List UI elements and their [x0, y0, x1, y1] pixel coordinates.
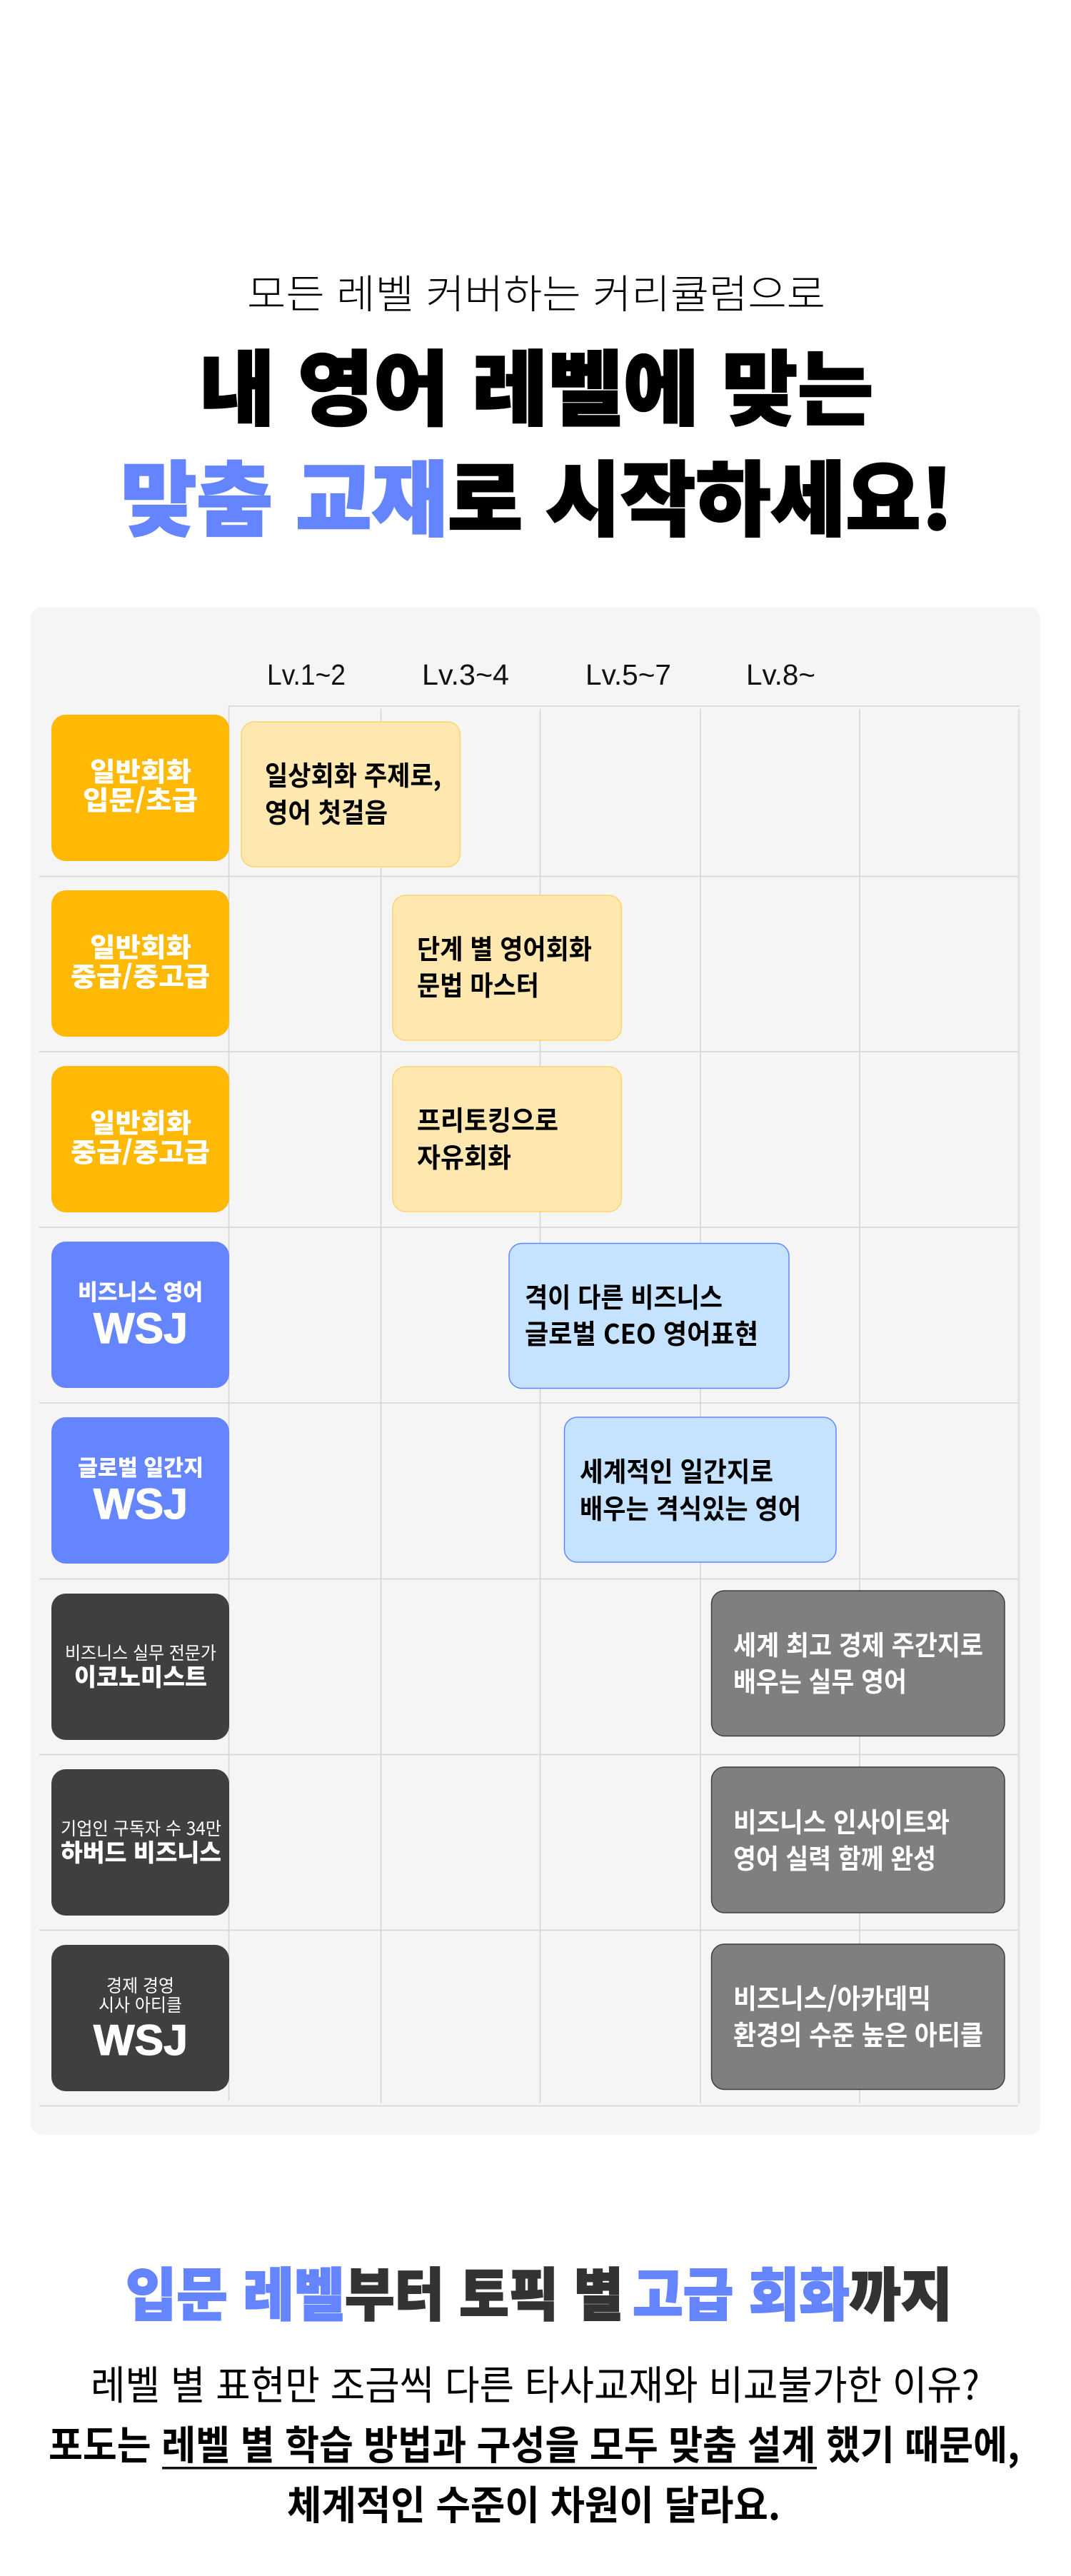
title: 내 영어 레벨에 맞는 — [199, 324, 873, 442]
label: 글로벌 일간지 WSJ: WSJ — [94, 1480, 188, 1528]
card: 비즈니스 인사이트: 비즈니스 인사이트와 — [733, 1801, 950, 1840]
card: 프리토킹: 자유회화 — [417, 1136, 511, 1175]
card: 비즈니스/아카데믹: 비즈니스/아카데믹 — [733, 1977, 931, 2016]
bottom heading: 까지 — [850, 2250, 952, 2333]
label: 글로벌 일간지 WSJ: 글로벌 일간지 — [78, 1450, 203, 1482]
card: 일상회화: 일상회화 주제로, — [265, 754, 441, 793]
label: 경제 경영 시사 아티클 WSJ: WSJ — [94, 2016, 188, 2064]
card: 프리토킹 — [393, 1067, 621, 1212]
card: 격이 다른 비즈니스: 격이 다른 비즈니스 — [525, 1276, 723, 1315]
card: 단계 별 영어회화 — [393, 895, 621, 1040]
level headers: Lv.8~ — [746, 658, 815, 691]
label: 이코노미스트 — [51, 1594, 229, 1740]
label: 이코노미스트: 이코노미스트 — [74, 1658, 207, 1693]
level headers: Lv.1~2 — [267, 658, 346, 691]
label: 일반회화 입문/초급 — [51, 715, 229, 861]
card: 격이 다른 비즈니스: 글로벌 CEO 영어표현 — [525, 1312, 758, 1352]
label: 일반회화 입문/초급: 입문/초급 — [83, 779, 198, 817]
bottom heading: 부터 토픽 별 — [345, 2250, 623, 2333]
label: 경제 경영 시사 아티클 WSJ: 시사 아티클 — [99, 1991, 182, 2017]
label: 일반회화 중급/중고급 (프리토킹): 일반회화 — [90, 1102, 191, 1140]
label: 경제 경영 시사 아티클 WSJ: 경제 경영 — [106, 1972, 174, 1998]
title — [121, 324, 953, 553]
card: 세계적인 일간지: 세계적인 일간지로 — [580, 1450, 773, 1489]
bottom heading: 입문 레벨 — [126, 2250, 345, 2333]
panel: curriculum table — [31, 608, 1040, 2135]
label: 일반회화 중급/중고급: 중급/중고급 — [71, 955, 210, 994]
card: 비즈니스 인사이트 — [711, 1767, 1005, 1913]
label: 일반회화 입문/초급: 일반회화 — [90, 750, 191, 789]
level headers: Lv.5~7 — [585, 658, 671, 691]
card: 세계 최고 경제 주간지 — [711, 1591, 1005, 1736]
title: 맞춤 교재 — [121, 435, 448, 553]
bottom text — [49, 2354, 1020, 2532]
subtitle: 모든 레벨 커버하는 커리큘럼으로 — [247, 263, 825, 321]
label: 일반회화 중급/중고급 (프리토킹) — [51, 1066, 229, 1212]
label: 일반회화 중급/중고급 — [51, 890, 229, 1037]
card: 비즈니스/아카데믹: 환경의 수준 높은 아티클 — [733, 2013, 983, 2053]
level headers: Lv.3~4 — [422, 658, 509, 691]
label: 글로벌 일간지 WSJ — [51, 1417, 229, 1564]
label: 일반회화 중급/중고급: 일반회화 — [90, 926, 191, 965]
label: 하버드 비즈니스 — [51, 1769, 229, 1916]
label: 하버드 비즈니스: 기업인 구독자 수 34만 — [61, 1815, 221, 1841]
card: 일상회화: 영어 첫걸음 — [265, 791, 388, 830]
card: 비즈니스 인사이트: 영어 실력 함께 완성 — [733, 1837, 936, 1876]
bottom heading — [126, 2250, 952, 2333]
card: 격이 다른 비즈니스 — [509, 1244, 789, 1388]
bottom text: 체계적인 수준이 차원이 달라요. — [287, 2474, 780, 2532]
bottom text: 포도는 레벨 별 학습 방법과 구성을 모두 맞춤 설계 했기 때문에, — [49, 2414, 1020, 2472]
label: 경제 경영 시사 아티클 WSJ — [51, 1945, 229, 2091]
card: 세계적인 일간지: 배우는 격식있는 영어 — [580, 1487, 801, 1526]
bottom heading: 고급 회화 — [633, 2250, 850, 2333]
card: 세계적인 일간지 — [564, 1417, 836, 1562]
card: 세계 최고 경제 주간지: 세계 최고 경제 주간지로 — [733, 1624, 983, 1663]
bottom text: 레벨 별 표현만 조금씩 다른 타사교재와 비교불가한 이유? — [91, 2354, 980, 2412]
level headers — [267, 658, 815, 691]
label: 일반회화 중급/중고급 (프리토킹): 중급/중고급 — [71, 1131, 210, 1169]
card: 프리토킹: 프리토킹으로 — [417, 1099, 558, 1138]
label: 비즈니스 영어 WSJ: 비즈니스 영어 — [78, 1274, 203, 1307]
card: 단계 별 영어회화: 단계 별 영어회화 — [417, 927, 592, 967]
card: 세계 최고 경제 주간지: 배우는 실무 영어 — [733, 1660, 907, 1699]
label: 비즈니스 영어 WSJ — [51, 1242, 229, 1388]
label: 비즈니스 영어 WSJ: WSJ — [94, 1304, 188, 1352]
label: 하버드 비즈니스: 하버드 비즈니스 — [61, 1833, 221, 1868]
label: 이코노미스트: 비즈니스 실무 전문가 — [65, 1639, 216, 1665]
card: 단계 별 영어회화: 문법 마스터 — [417, 964, 539, 1003]
card: 비즈니스/아카데믹 — [711, 1944, 1005, 2089]
title: 로 시작하세요! — [448, 435, 953, 553]
card: 일상회화 — [241, 722, 460, 867]
